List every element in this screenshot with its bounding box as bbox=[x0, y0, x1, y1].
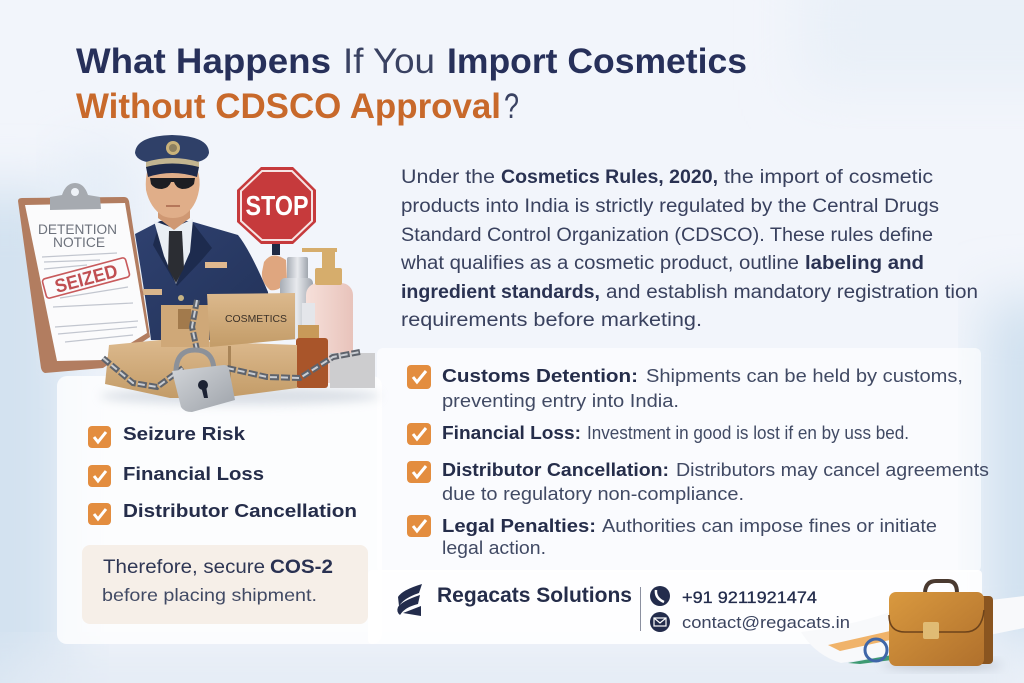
intro paragraph: and establish mandatory registration tion bbox=[606, 282, 978, 303]
phone number: +91 9211921474 bbox=[682, 588, 817, 607]
intro paragraph: Standard Control Organization (CDSCO). These rules define bbox=[401, 225, 933, 246]
officer sunglasses bbox=[150, 178, 195, 189]
officer badge details bbox=[205, 262, 227, 268]
illustration: flag bbox=[801, 596, 1024, 664]
callout: secure COS-2: Therefore, secure bbox=[103, 557, 265, 578]
callout: secure COS-2: COS-2 bbox=[270, 557, 333, 578]
item: Customs Detention: Shipments can be held by customs, bbox=[646, 366, 963, 386]
item: Customs Detention: preventing entry into India. bbox=[442, 391, 679, 411]
item: Legal Penalties: legal action. bbox=[442, 538, 546, 558]
intro paragraph: products into India is strictly regulated by the Central Drugs bbox=[401, 196, 939, 217]
illustration: stop sign bbox=[237, 167, 316, 290]
check: Customs Detention bbox=[407, 365, 431, 389]
intro paragraph: what qualifies as a cosmetic product, outline bbox=[400, 253, 799, 274]
illustration: officer bbox=[135, 135, 272, 340]
officer shirt bbox=[154, 219, 193, 284]
item: Legal Penalties: Legal Penalties: bbox=[442, 515, 596, 536]
logo: Regacats mark bbox=[397, 584, 422, 616]
officer tie bbox=[168, 231, 184, 283]
intro paragraph: the import of cosmetic bbox=[724, 167, 933, 188]
item: Customs Detention: Customs Detention: bbox=[442, 365, 638, 386]
consequences list bbox=[407, 365, 989, 558]
title: Import Cosmetics bbox=[447, 42, 747, 81]
label: Distributor Cancellation: Distributor Cancellation bbox=[123, 500, 357, 521]
label: Seizure Risk: Seizure Risk bbox=[123, 423, 246, 444]
item: Financial Loss: Investment in good is lost if en by uss bed. bbox=[587, 423, 909, 443]
illustration: floor shadow bbox=[100, 387, 380, 405]
intro paragraph: ingredient standards, bbox=[401, 282, 600, 303]
intro paragraph: Under the bbox=[401, 167, 495, 188]
item: Financial Loss bbox=[442, 422, 909, 443]
intro paragraph bbox=[400, 167, 978, 331]
intro paragraph: labeling and bbox=[805, 253, 924, 274]
item: Legal Penalties bbox=[442, 515, 937, 558]
callout: secure COS-2 bbox=[82, 545, 368, 624]
divider bbox=[640, 587, 641, 631]
check: Financial Loss bbox=[88, 465, 111, 487]
officer mouth bbox=[166, 205, 180, 207]
item: Distributor Cancellation: due to regulatory non-compliance. bbox=[442, 484, 744, 504]
title: What Happens bbox=[76, 42, 331, 81]
item: Legal Penalties: Authorities can impose fines or initiate bbox=[602, 516, 937, 536]
panel: contact strip bbox=[368, 570, 982, 644]
illustration: briefcase bbox=[882, 581, 1002, 669]
illustration: clipboard bbox=[18, 183, 150, 373]
illustration: clipboard: SEIZED bbox=[53, 261, 120, 298]
check: Legal Penalties bbox=[407, 515, 431, 537]
panel: bottom left card bbox=[57, 376, 382, 644]
check: Distributor Cancellation bbox=[88, 503, 111, 525]
title: If You bbox=[343, 42, 435, 81]
check: Financial Loss bbox=[407, 423, 431, 445]
officer cap bbox=[135, 135, 209, 163]
officer jacket bbox=[135, 221, 272, 340]
intro paragraph: Cosmetics Rules, 2020, bbox=[501, 167, 718, 188]
illustration: chain and padlock bbox=[103, 300, 360, 412]
illustration: clipboard: NOTICE bbox=[53, 234, 105, 250]
illustration: clipboard: DETENTION bbox=[38, 221, 117, 237]
item: Financial Loss: Financial Loss: bbox=[442, 422, 581, 443]
icon: phone bbox=[650, 586, 670, 606]
illustration: stop sign: STOP bbox=[246, 190, 308, 221]
left checklist bbox=[88, 423, 357, 525]
email address: contact@regacats.in bbox=[682, 613, 850, 632]
illustration: boxes bbox=[105, 293, 297, 398]
title bbox=[76, 42, 747, 126]
brand name: Regacats Solutions bbox=[437, 584, 632, 607]
item: Customs Detention bbox=[442, 365, 963, 411]
illustration: boxes: COSMETICS bbox=[225, 313, 287, 325]
item: Distributor Cancellation bbox=[442, 459, 989, 504]
officer neck and head bbox=[158, 200, 190, 230]
callout: secure COS-2: before placing shipment. bbox=[102, 585, 317, 605]
panel: consequences card bbox=[377, 348, 981, 572]
label: Financial Loss: Financial Loss bbox=[123, 463, 264, 484]
item: Distributor Cancellation: Distributors may cancel agreements bbox=[676, 460, 989, 480]
icon: email bbox=[650, 612, 670, 632]
illustration: cosmetic bottles bbox=[280, 248, 375, 388]
check: Distributor Cancellation bbox=[407, 461, 431, 483]
intro paragraph: requirements before marketing. bbox=[401, 310, 702, 331]
title: Without CDSCO Approval bbox=[76, 87, 501, 126]
check: Seizure Risk bbox=[88, 426, 111, 448]
title: ? bbox=[504, 87, 519, 126]
item: Distributor Cancellation: Distributor Cancellation: bbox=[442, 459, 669, 480]
